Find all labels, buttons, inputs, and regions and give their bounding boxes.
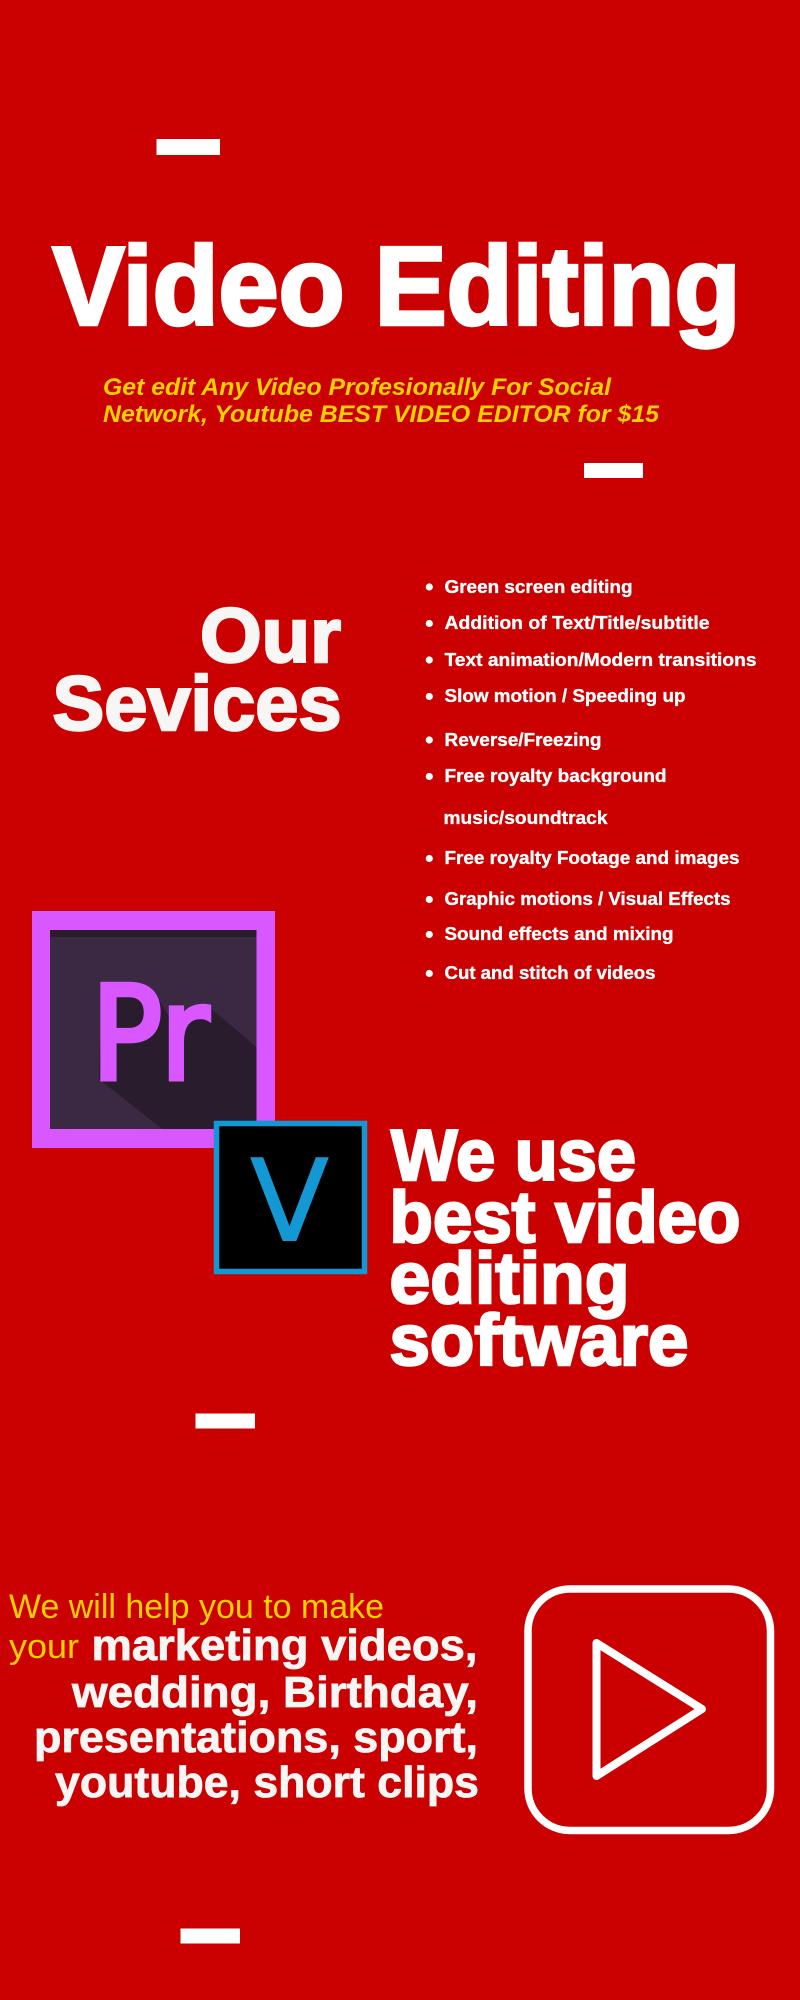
- list items: Sound effects and mixing: [444, 923, 674, 944]
- services list: [426, 576, 756, 983]
- list items: [444, 576, 756, 983]
- accent bar right: [584, 463, 643, 478]
- video types text: wedding, Birthday,: [71, 1669, 478, 1717]
- list items: Text animation/Modern transitions: [444, 649, 756, 670]
- accent bar top: [156, 139, 220, 155]
- heading: our services: Sevices: [52, 661, 342, 747]
- list items: Green screen editing: [444, 576, 632, 597]
- heading: software: software: [390, 1301, 688, 1381]
- subtitle: [103, 374, 659, 428]
- subtitle: Network, Youtube BEST VIDEO EDITOR for $15: [103, 401, 659, 428]
- subtitle: Get edit Any Video Profesionally For Social: [103, 374, 612, 401]
- list items: Cut and stitch of videos: [444, 962, 656, 983]
- heading: software: [390, 1116, 740, 1381]
- icon: premiere pro: [32, 911, 275, 1148]
- list items: Free royalty background: [444, 765, 666, 786]
- intro text: your: [9, 1628, 79, 1666]
- heading: our services: [52, 593, 342, 747]
- video types text: presentations, sport,: [34, 1714, 478, 1762]
- bullets: [426, 583, 433, 977]
- icon: vegas: V: [250, 1136, 329, 1268]
- accent bar middle: [196, 1414, 255, 1428]
- heading: software: We use: [391, 1116, 636, 1196]
- heading: our services: Our: [200, 593, 341, 679]
- list items: Addition of Text/Title/subtitle: [444, 612, 710, 633]
- icon: play button: [528, 1589, 770, 1830]
- list items: music/soundtrack: [444, 807, 608, 828]
- intro text: We will help you to make: [9, 1588, 384, 1626]
- list items: Graphic motions / Visual Effects: [444, 888, 730, 909]
- icon: vegas: [216, 1124, 364, 1272]
- list items: Free royalty Footage and images: [444, 847, 740, 868]
- video types text: [34, 1622, 479, 1807]
- video types text: marketing videos,: [92, 1622, 477, 1670]
- list items: Slow motion / Speeding up: [444, 685, 686, 706]
- list items: Reverse/Freezing: [444, 729, 602, 750]
- title: Video Editing: [52, 224, 740, 348]
- heading: software: editing: [390, 1239, 630, 1319]
- accent bar bottom: [180, 1928, 240, 1944]
- intro text: [9, 1588, 384, 1666]
- icon: premiere pro: Pr: [91, 958, 209, 1110]
- video types text: youtube, short clips: [55, 1759, 479, 1807]
- heading: software: best video: [390, 1178, 740, 1258]
